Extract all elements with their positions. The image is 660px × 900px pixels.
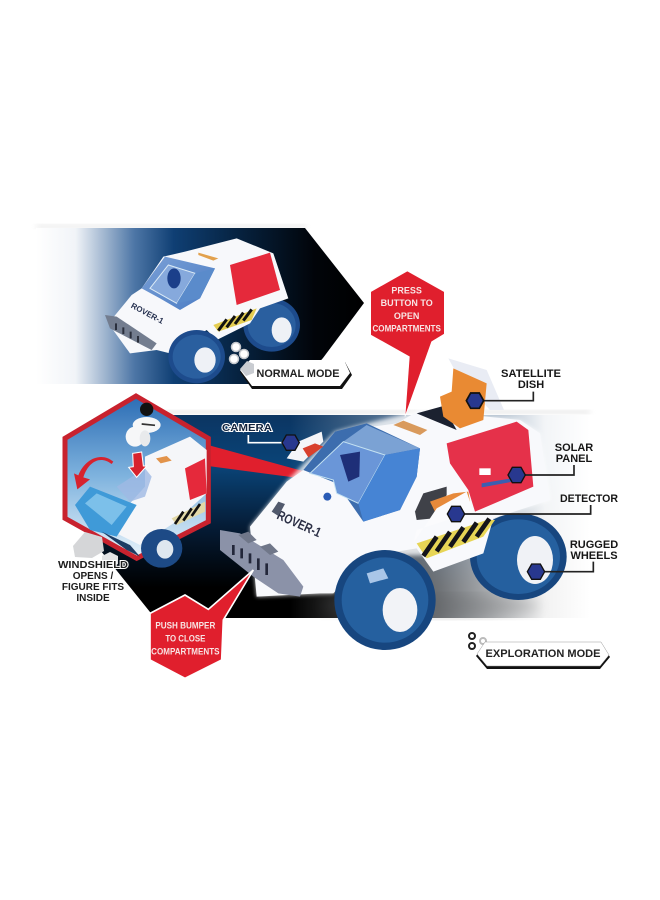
rear wheel [470,513,567,600]
body [108,238,288,353]
label: satellite dish: DISH [518,379,544,391]
panel: exploration mode background [80,410,590,618]
label: solar panel: SOLAR [555,442,593,454]
camera mount [287,432,323,462]
label: rugged wheels: WHEELS [570,550,618,562]
detector arm [415,487,470,520]
inset dark lower body [102,532,140,557]
label: detector: DETECTOR [560,493,618,505]
white halo [250,410,550,597]
bumper [220,530,303,597]
text: windshield caption: FIGURE FITS [62,582,124,593]
callout text: TO CLOSE [165,634,205,644]
red wedge pointing to windshield [208,445,310,479]
callout text: COMPARTMENTS [372,324,441,334]
bumper [105,315,157,350]
label: satellite dish: SATELLITE [501,368,561,380]
orange button [393,421,427,435]
label: camera: CAMERA [222,423,272,434]
callout: push bumper [150,570,253,678]
leader: rugged wheels [536,562,593,572]
callout text: OPEN [394,311,419,321]
body [250,410,550,597]
leader lines and hex markers [248,392,593,579]
inset: windshield opens [65,396,208,568]
label: rugged wheels: RUGGED [570,539,618,551]
blue knob [323,493,331,501]
text: windshield caption [58,560,128,604]
text: windshield caption: WINDSHIELD [58,560,128,571]
marker: camera [282,435,299,450]
label: satellite dish [501,368,561,391]
text: windshield caption: OPENS / [73,571,113,582]
hazard stripes [417,519,495,558]
tag: normal mode [240,360,352,389]
marker: satellite dish [466,393,484,408]
inset hazard stripes [172,502,205,525]
inset down arrow [129,452,147,477]
icon: exploration hexagon links [469,633,486,649]
leader: camera [248,435,282,443]
marker: detector [447,506,465,522]
callout text: PUSH BUMPER [155,620,216,630]
marker: solar panel [508,467,525,483]
label: solar panel [555,442,593,465]
callout text: BUTTON TO [381,298,433,308]
inset wheel [141,529,182,568]
red side panel [230,253,280,305]
body fender [413,492,473,543]
vehicle shadow [320,594,540,618]
hazard stripes [213,308,257,332]
vehicle: exploration mode rover [220,358,567,650]
text: windshield caption: INSIDE [76,593,110,604]
rover logo text: ROVER-1 [129,301,166,326]
callout text: COMPARTMENTS [151,646,219,656]
tag: exploration mode: EXPLORATION MODE [486,648,600,660]
inset astronaut figure [126,403,161,447]
leader: detector [456,505,591,514]
label: solar panel: PANEL [556,453,593,465]
rover logo text: ROVER-1 [275,507,324,540]
rover logo mark [272,502,285,516]
raised satellite dish [440,358,504,428]
marker: rugged wheels [527,564,545,579]
leader: solar panel [517,465,574,475]
panel: normal mode background [36,224,364,384]
vehicle: normal mode rover [105,238,300,383]
inset open windshield [75,468,152,537]
front wheel [334,550,436,650]
inset curved arrow [74,457,113,489]
icon: normal mode hexagon dots [230,342,248,364]
label: rugged wheels [570,539,618,562]
callout: press button [371,271,444,417]
front wheel [168,330,225,383]
inset orange button [156,456,172,463]
windshield [303,423,420,522]
hatch opening [417,406,457,430]
callout text: PRESS [391,285,422,295]
tag: exploration mode [476,642,610,669]
leader: satellite dish [475,392,533,401]
red side panel [447,422,533,512]
icon: windshield label hexagon [73,532,118,568]
inset red panel [185,458,207,500]
callout text [151,620,219,656]
callout text [372,285,441,334]
windshield [142,257,215,310]
inset rover body [117,437,207,545]
tag: normal mode: NORMAL MODE [256,368,340,380]
rear wheel [243,298,300,352]
orange button [198,253,218,261]
